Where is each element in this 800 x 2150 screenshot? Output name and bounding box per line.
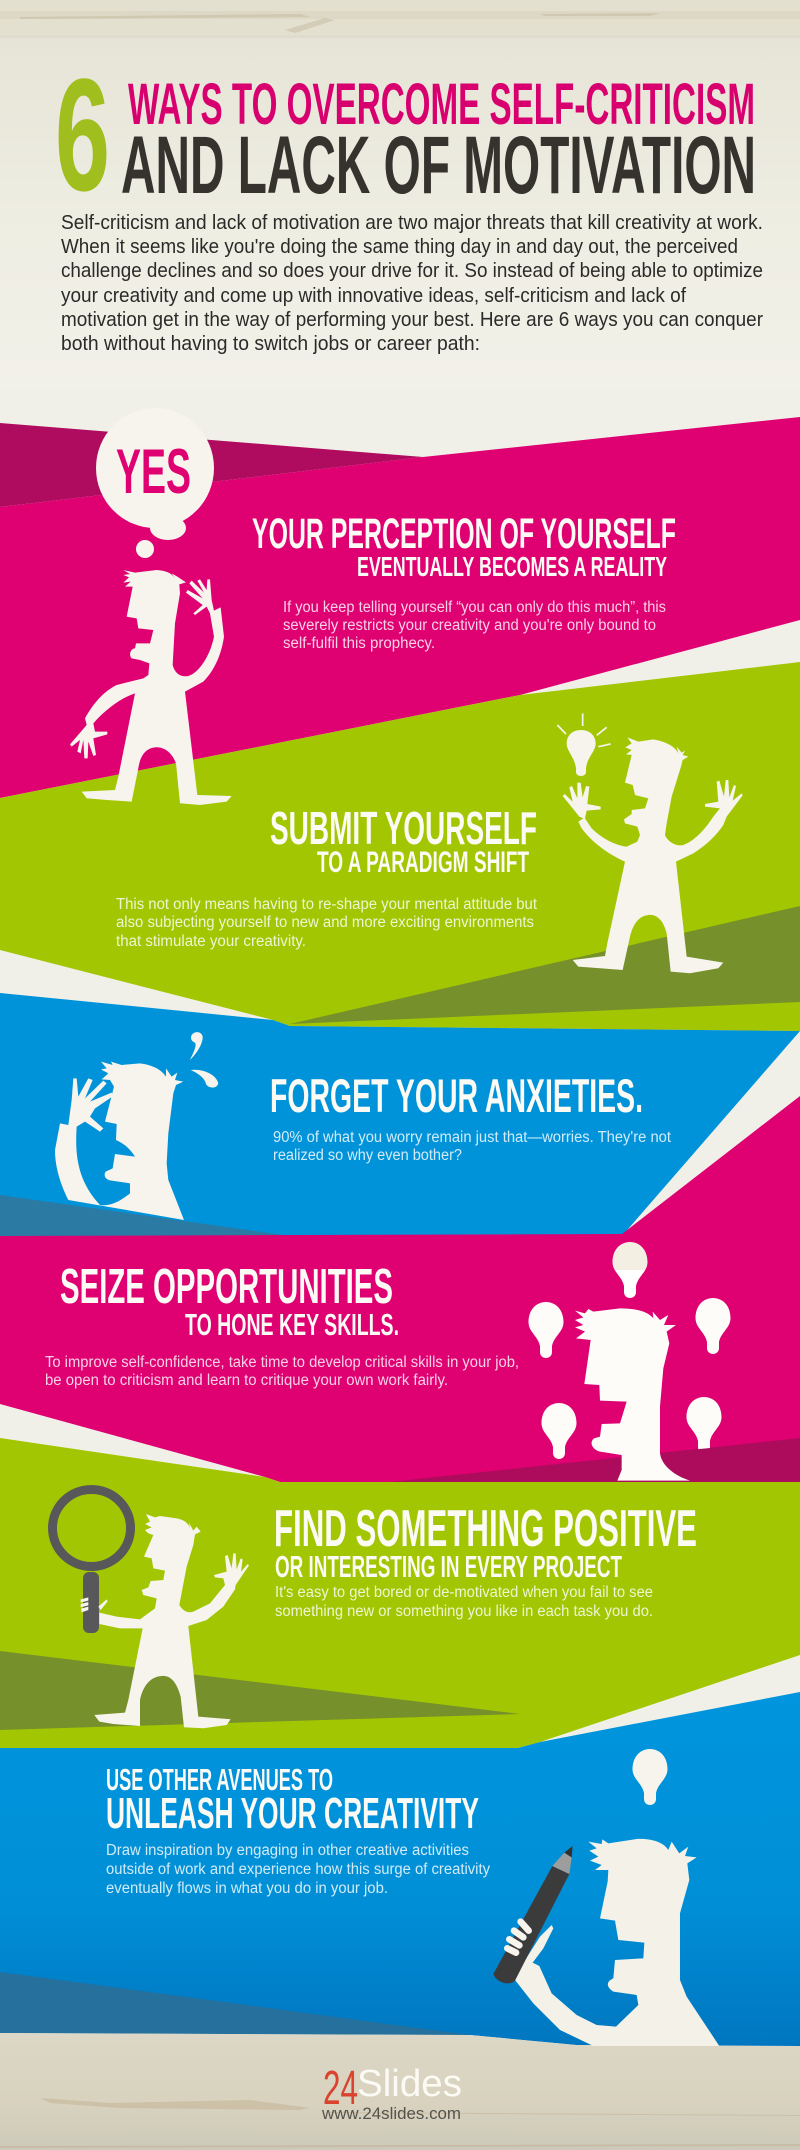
icon: man with light bulb bbox=[557, 713, 743, 973]
website url: www.24slides.com bbox=[321, 2104, 461, 2123]
body text: If you keep telling yourself “you can only do this much”, this bbox=[283, 599, 666, 616]
logo: Slides bbox=[357, 2063, 462, 2105]
heading bbox=[106, 1762, 479, 1838]
panel: creativity bbox=[106, 1749, 719, 2046]
body text: This not only means having to re-shape your mental attitude but bbox=[116, 896, 538, 913]
intro text: your creativity and come up with innovative ideas, self-criticism and lack of bbox=[61, 285, 686, 307]
heading: UNLEASH YOUR CREATIVITY bbox=[106, 1789, 479, 1838]
intro text: When it seems like you're doing the same thing day in and day out, the perceived bbox=[61, 236, 738, 258]
intro text bbox=[61, 212, 763, 355]
icon: man with magnifying glass bbox=[81, 1514, 249, 1728]
intro text: Self-criticism and lack of motivation are two major threats that kill creativity at work. bbox=[61, 212, 763, 234]
icon: magnifying glass bbox=[52, 1490, 130, 1633]
heading bbox=[252, 510, 676, 582]
title bbox=[55, 45, 756, 224]
body text: It's easy to get bored or de-motivated when you fail to see bbox=[275, 1584, 653, 1601]
heading: SUBMIT YOURSELF bbox=[270, 802, 537, 854]
body text: also subjecting yourself to new and more exciting environments bbox=[116, 914, 534, 931]
body text: be open to criticism and learn to critique your own work fairly. bbox=[45, 1372, 448, 1389]
body text bbox=[45, 1354, 519, 1389]
body text bbox=[273, 1129, 672, 1164]
panel: something positive bbox=[52, 1490, 697, 1728]
heading bbox=[60, 1260, 399, 1342]
body text bbox=[275, 1584, 653, 1620]
body text: outside of work and experience how this surge of creativity bbox=[106, 1861, 490, 1878]
body text: that stimulate your creativity. bbox=[116, 933, 306, 950]
heading bbox=[274, 1500, 697, 1584]
heading: SEIZE OPPORTUNITIES bbox=[60, 1260, 393, 1314]
intro text: motivation get in the way of performing your best. Here are 6 ways you can conquer bbox=[61, 309, 763, 331]
body text bbox=[116, 896, 538, 950]
body text: Draw inspiration by engaging in other creative activities bbox=[106, 1842, 469, 1859]
intro text: challenge declines and so does your drive for it. So instead of being able to optimize bbox=[61, 260, 763, 282]
intro text: both without having to switch jobs or career path: bbox=[61, 333, 480, 355]
icon: thinking man with YES bubble: YES bbox=[116, 437, 191, 507]
body text bbox=[106, 1842, 490, 1897]
heading: USE OTHER AVENUES TO bbox=[106, 1762, 333, 1797]
body text: To improve self-confidence, take time to develop critical skills in your job, bbox=[45, 1354, 519, 1371]
icon: thinking man with YES bubble bbox=[70, 408, 232, 805]
icon: anxious man with sweat drops bbox=[55, 1032, 218, 1220]
panel: anxieties bbox=[55, 1032, 672, 1220]
body text: self-fulfil this prophecy. bbox=[283, 635, 435, 652]
logo: 24 bbox=[323, 2062, 358, 2115]
body text bbox=[283, 599, 666, 652]
heading: TO HONE KEY SKILLS. bbox=[185, 1307, 399, 1342]
icon: man surrounded by light bulbs bbox=[528, 1242, 730, 1481]
icon: light bulb bbox=[632, 1749, 668, 1805]
body text: 90% of what you worry remain just that—worries. They're not bbox=[273, 1129, 672, 1146]
logo bbox=[321, 2062, 462, 2123]
body text: severely restricts your creativity and you're only bound to bbox=[283, 617, 656, 634]
icon: man holding pencil bbox=[493, 1839, 719, 2046]
panel: perception bbox=[70, 408, 676, 805]
panel: paradigm shift bbox=[116, 713, 743, 973]
heading: TO A PARADIGM SHIFT bbox=[317, 846, 529, 879]
heading bbox=[270, 802, 537, 879]
body text: eventually flows in what you do in your job. bbox=[106, 1880, 388, 1897]
big number six: 6 bbox=[55, 45, 110, 224]
body text: something new or something you like in each task you do. bbox=[275, 1603, 653, 1620]
panel: seize opportunities bbox=[45, 1242, 730, 1481]
body text: realized so why even bother? bbox=[273, 1147, 462, 1164]
